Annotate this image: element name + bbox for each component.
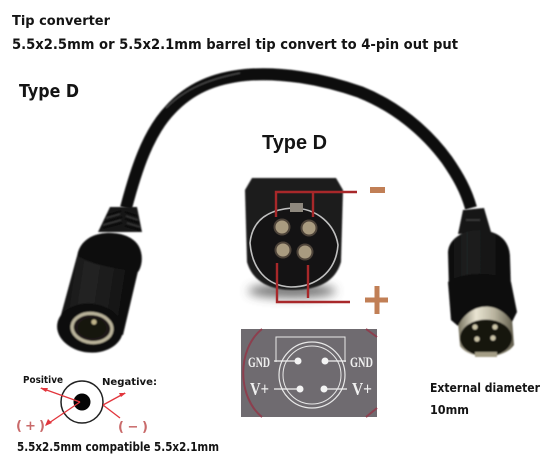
minus sign [370,187,385,193]
connector key [290,203,303,212]
metal ring [71,311,113,345]
photo: barrel jack connector [55,207,142,356]
centre pin [91,319,97,325]
label positive: Positive [23,375,63,386]
pin face [460,320,512,356]
heading: Type D left: Type D [19,81,79,102]
pins [472,324,478,330]
label V+ left: V+ [250,379,269,399]
red lines negative [276,192,357,217]
pin: top right [302,220,316,236]
strain relief [458,208,491,234]
polarity diagram [16,375,157,435]
socket interior [78,318,106,338]
centre dot [74,394,90,410]
strain relief [98,207,142,232]
red arrows [41,388,125,425]
outer ring [61,381,103,423]
connector housing [245,178,343,290]
pin: top left [274,220,290,234]
label GND right: GND [350,355,373,371]
plus sign [365,286,388,314]
pinout pins [294,358,328,392]
caption: 10mm: 10mm [430,403,469,417]
panel: GND and V+ pinout [241,329,377,417]
barrel face [55,300,125,356]
barrel body [58,256,138,335]
label V+ right: V+ [352,379,372,399]
caption: external diameter: External diameter [430,381,540,395]
label negative: Negative: [102,377,157,388]
photo: pinout connector with red markings [245,178,388,314]
red lines positive [277,263,350,302]
heading: Type D centre: Type D [262,132,327,154]
caption: compatibility: 5.5x2.5mm compatible 5.5x2.1mm [17,440,219,454]
pinout wires [274,361,347,389]
cable [126,73,471,208]
subtitle: barrel tip description: 5.5x2.5mm or 5.5x2.1mm barrel tip convert to 4-pin out put [12,37,458,53]
photo: 4-pin DIN plug [448,208,517,357]
metal shell [458,304,514,357]
label GND left: GND [248,355,270,371]
collar [77,233,142,272]
plug body [448,230,511,290]
pin: bottom right [298,244,312,260]
connector metal ring [250,208,338,287]
label plus sign: (+) [16,419,45,434]
metal key [475,352,497,357]
pinout outline [276,337,345,362]
title: tip converter: Tip converter [12,13,110,29]
pin: bottom left [276,242,290,258]
collar [448,274,517,326]
label minus sign: (−) [118,420,148,435]
